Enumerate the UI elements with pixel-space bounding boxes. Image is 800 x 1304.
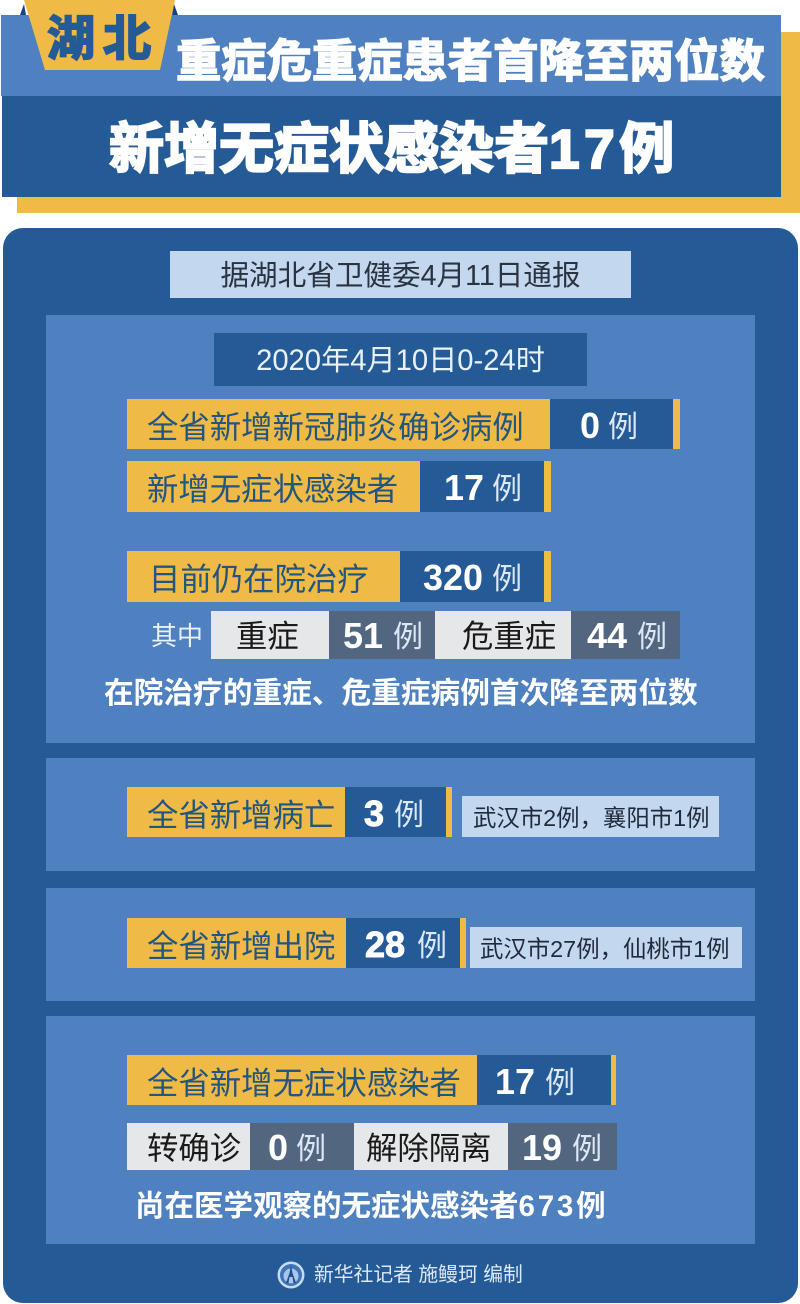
- row: severe and critical breakdown: [151, 611, 680, 659]
- row: severe and critical breakdown: 例: [637, 621, 667, 654]
- tab label: 湖北: [47, 13, 159, 66]
- row: province new asymptomatic: [127, 1055, 616, 1105]
- row: in hospital: [127, 551, 551, 602]
- row: new discharged: [127, 918, 466, 968]
- row: converted and released: 转确诊: [147, 1131, 241, 1166]
- source note: [170, 251, 631, 298]
- row: new deaths: 例: [394, 799, 424, 832]
- panel: discharged: [46, 888, 755, 1001]
- row: converted and released: 解除隔离: [366, 1131, 492, 1166]
- row: new asymptomatic: 例: [492, 473, 522, 506]
- row: new asymptomatic: 新增无症状感染者: [147, 472, 398, 507]
- row: province new asymptomatic: 17: [495, 1061, 535, 1102]
- icon: Xinhua logo: [278, 1262, 304, 1288]
- header yellow backing: [17, 32, 800, 213]
- row: converted and released: [127, 1123, 617, 1170]
- row: new deaths: 全省新增病亡: [147, 798, 335, 833]
- row: converted and released: 0: [268, 1127, 288, 1168]
- row: new deaths: 3: [364, 793, 384, 834]
- row: severe and critical breakdown: 其中: [151, 621, 203, 651]
- callout: severe cases fall to double digits: 在院治疗的重症、危重症病例首次降至两位数: [104, 677, 698, 710]
- title line 1: 重症危重症患者首降至两位数: [176, 36, 765, 87]
- row: in hospital: 目前仍在院治疗: [149, 562, 369, 597]
- row: in hospital: 320: [423, 557, 483, 598]
- panel: deaths: [46, 758, 755, 871]
- row: new asymptomatic: 17: [444, 467, 484, 508]
- title line 2: 新增无症状感染者17例: [109, 118, 674, 180]
- row: new discharged: 例: [417, 930, 447, 963]
- row: severe and critical breakdown: 重症: [236, 619, 299, 654]
- panel: asymptomatic: [46, 1016, 755, 1244]
- row: severe and critical breakdown: 危重症: [462, 619, 556, 654]
- note: discharged by city: [470, 927, 742, 968]
- row: severe and critical breakdown: 例: [393, 621, 423, 654]
- row: new confirmed: 0: [580, 405, 600, 446]
- footer credit: [278, 1262, 523, 1288]
- header dark band: [2, 96, 781, 197]
- row: in hospital: 例: [492, 563, 522, 596]
- row: new confirmed: [127, 399, 680, 449]
- header light band: [1, 15, 781, 96]
- row: new asymptomatic: [127, 461, 551, 512]
- header banner: [1, 0, 800, 213]
- note: deaths by city: 武汉市2例，襄阳市1例: [473, 805, 710, 831]
- note: discharged by city: 武汉市27例，仙桃市1例: [480, 936, 730, 962]
- icon: Hubei ribbon tab: [20, 0, 178, 70]
- row: province new asymptomatic: 全省新增无症状感染者: [147, 1066, 461, 1101]
- note: deaths by city: [462, 796, 719, 837]
- callout: under medical observation: 尚在医学观察的无症状感染者673例: [135, 1190, 606, 1223]
- row: province new asymptomatic: 例: [545, 1067, 575, 1100]
- row: new confirmed: 全省新增新冠肺炎确诊病例: [147, 410, 524, 445]
- row: severe and critical breakdown: 51: [343, 615, 383, 656]
- panel: current status: [46, 315, 755, 743]
- date label: 2020年4月10日0-24时: [256, 345, 545, 377]
- row: new confirmed: 例: [608, 411, 638, 444]
- credit text: 新华社记者 施鳗珂 编制: [314, 1264, 523, 1286]
- row: converted and released: 例: [572, 1133, 602, 1166]
- source note: 据湖北省卫健委4月11日通报: [220, 260, 581, 292]
- date label: [214, 333, 587, 386]
- row: severe and critical breakdown: 44: [587, 615, 627, 656]
- row: new discharged: 28: [365, 924, 405, 965]
- row: new deaths: [127, 787, 452, 837]
- row: new discharged: 全省新增出院: [147, 929, 335, 964]
- row: converted and released: 例: [296, 1133, 326, 1166]
- row: converted and released: 19: [522, 1127, 562, 1168]
